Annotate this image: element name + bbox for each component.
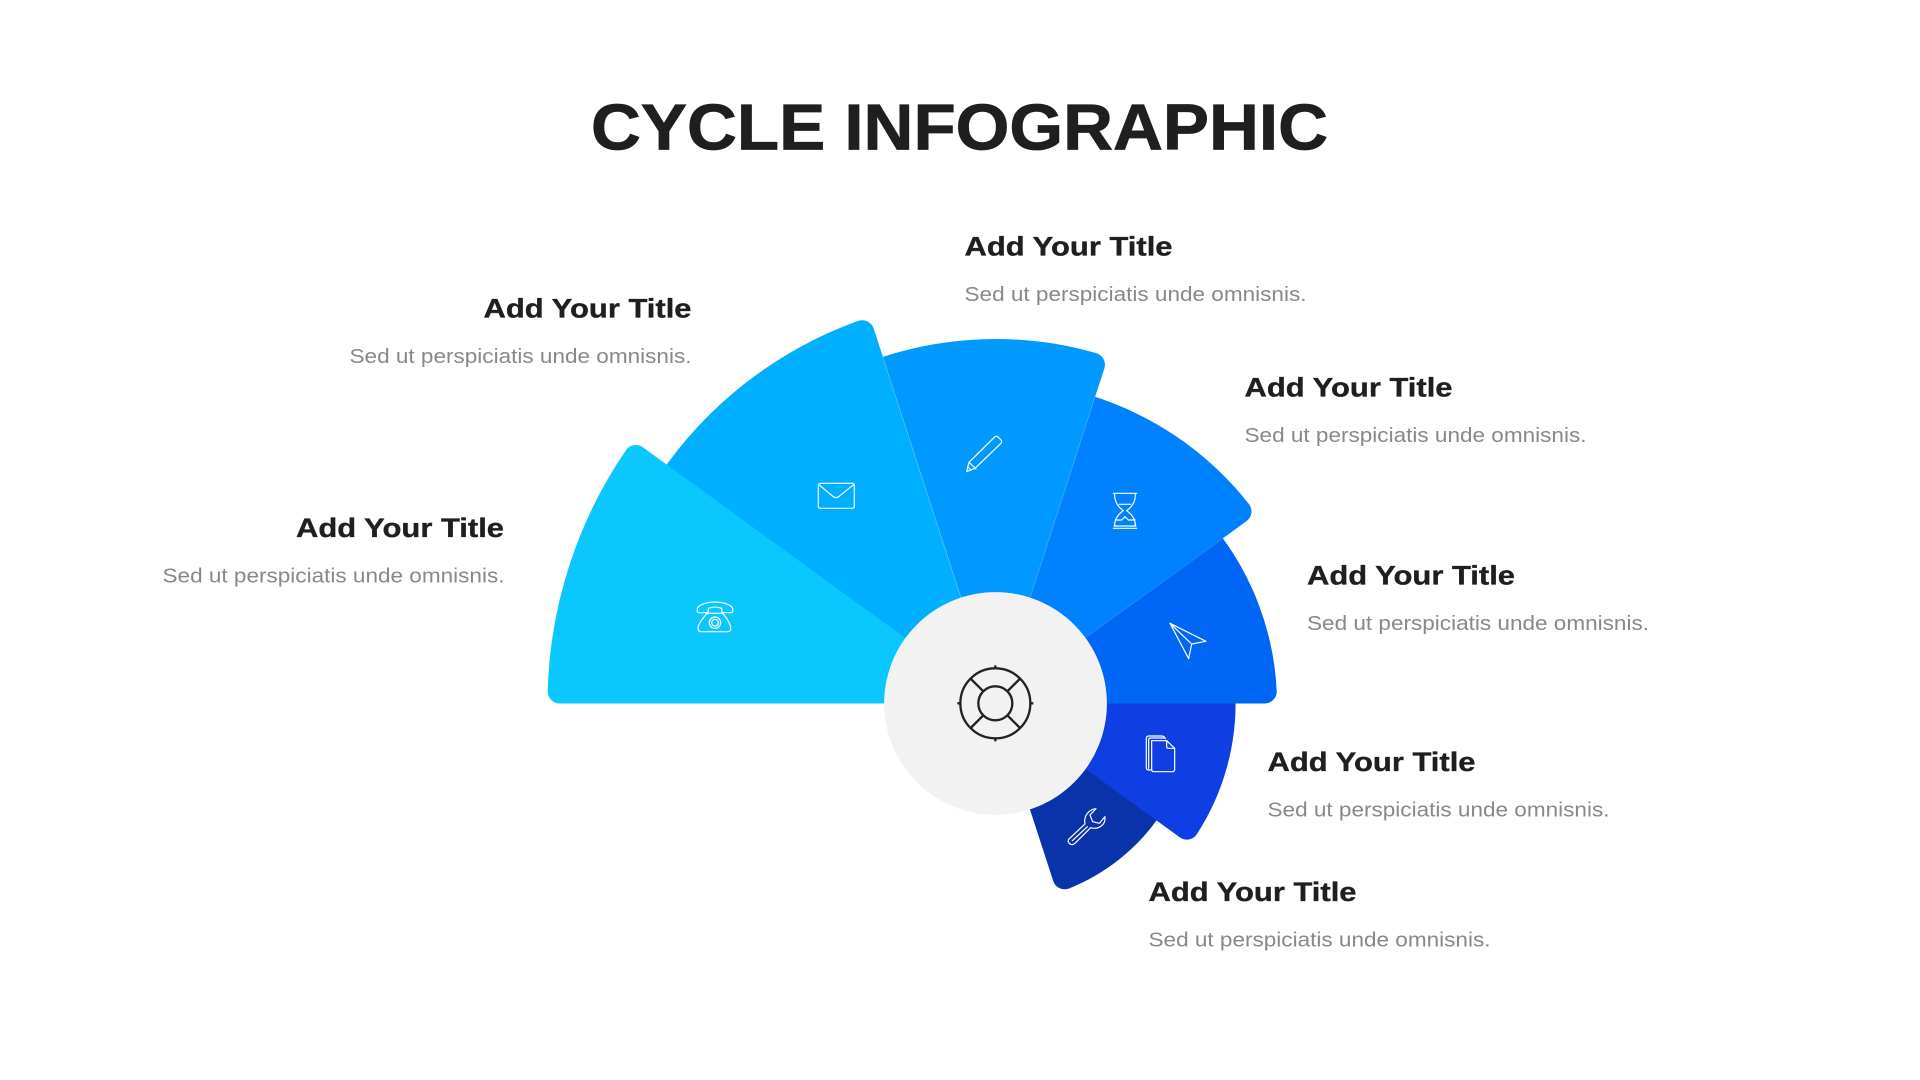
icon: wrench	[1068, 809, 1105, 845]
segment 3	[871, 339, 1105, 704]
label: segment 5	[1307, 560, 1649, 635]
fan chart	[548, 320, 1277, 889]
label: segment 5: Sed ut perspiciatis unde omnisnis.	[1307, 612, 1649, 635]
title: CYCLE INFOGRAPHIC	[591, 90, 1328, 164]
segment 6	[996, 695, 1236, 840]
label: segment 3: Sed ut perspiciatis unde omnisnis.	[964, 283, 1306, 306]
label: segment 7: Add Your Title	[1148, 877, 1356, 907]
icon: pencil	[967, 436, 1002, 472]
icon: lifebuoy	[957, 665, 1033, 741]
icon: paper plane	[1170, 623, 1206, 659]
label: segment 1: Sed ut perspiciatis unde omnisnis.	[162, 564, 505, 588]
label: segment 4	[1244, 372, 1586, 447]
icon: hourglass	[1113, 493, 1137, 528]
segment 2	[658, 320, 996, 704]
segment 1	[548, 445, 996, 704]
segment 7	[996, 704, 1160, 889]
label: segment 7	[1148, 877, 1490, 952]
center circle	[884, 592, 1107, 815]
label: segment 6	[1268, 747, 1610, 822]
label: segment 1	[162, 513, 505, 588]
icon: envelope	[818, 483, 854, 508]
label: segment 2: Sed ut perspiciatis unde omnisnis.	[350, 345, 692, 368]
label: segment 2: Add Your Title	[484, 294, 692, 324]
icon: documents	[1146, 736, 1175, 772]
label: segment 4: Add Your Title	[1244, 372, 1452, 402]
icon: telephone	[697, 602, 733, 632]
label: segment 4: Sed ut perspiciatis unde omnisnis.	[1244, 424, 1586, 447]
segment 5	[996, 530, 1277, 704]
label: segment 6: Add Your Title	[1268, 747, 1476, 777]
label: segment 5: Add Your Title	[1307, 560, 1515, 590]
label: segment 1: Add Your Title	[296, 513, 504, 543]
segment 4	[996, 394, 1251, 704]
label: segment 6: Sed ut perspiciatis unde omnisnis.	[1268, 798, 1610, 822]
label: segment 3	[964, 232, 1306, 306]
label: segment 3: Add Your Title	[964, 232, 1172, 262]
label: segment 2	[350, 294, 692, 368]
label: segment 7: Sed ut perspiciatis unde omnisnis.	[1148, 928, 1490, 952]
